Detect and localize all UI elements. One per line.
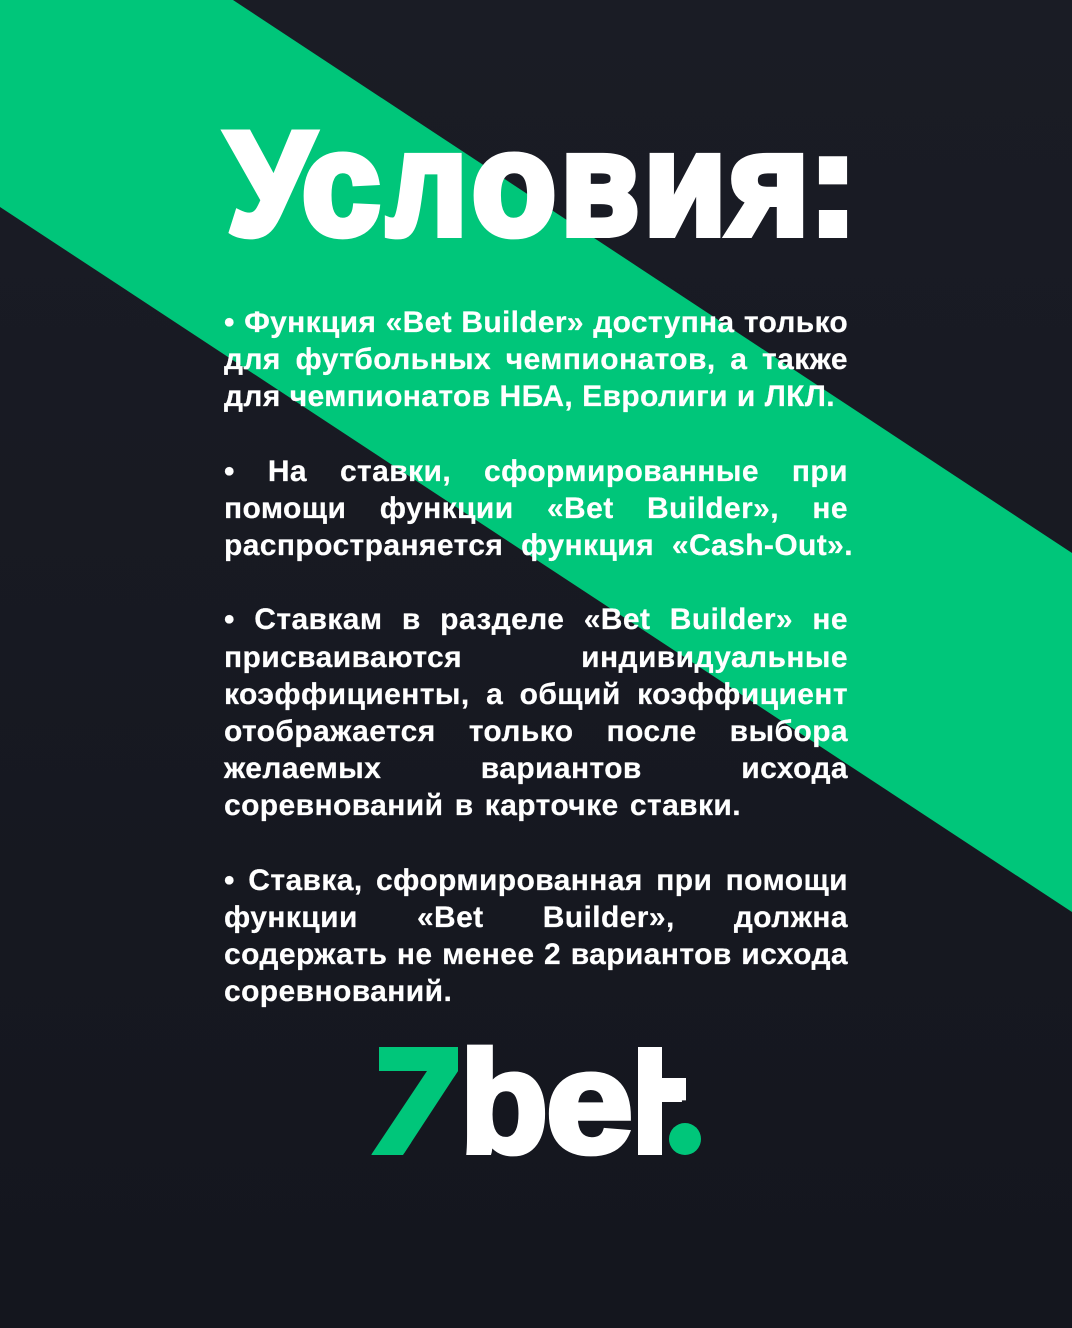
condition 4: • Ставка, сформированная при помощи (224, 864, 848, 897)
title: : (809, 102, 857, 265)
condition 3: коэффициенты, а общий коэффициент (224, 678, 848, 711)
condition 3 (224, 603, 848, 822)
text block: conditions (224, 306, 853, 1008)
condition 3: присваиваются индивидуальные (224, 641, 848, 674)
title: У (227, 102, 315, 265)
condition 2: • На ставки, сформированные при (224, 455, 848, 488)
condition 1: для футбольных чемпионатов, а также (224, 343, 848, 376)
title: о (472, 102, 556, 265)
title: в (561, 102, 639, 265)
condition 3: отображается только после выбора (224, 715, 848, 748)
condition 1: • Функция «Bet Builder» доступна только (224, 306, 848, 339)
condition 4: содержать не менее 2 вариантов исхода (224, 938, 848, 971)
title: и (644, 102, 726, 265)
title: я (728, 102, 809, 265)
title (220, 102, 857, 265)
title: л (387, 102, 467, 265)
logo: 7bet.: e (546, 1022, 633, 1183)
logo: 7bet. (372, 1044, 701, 1156)
condition 4: функции «Bet Builder», должна (224, 901, 848, 934)
logo: 7bet.: b (460, 1022, 548, 1183)
condition 1 (224, 306, 848, 413)
condition 2: распространяется функция «Cash-Out». (224, 529, 853, 562)
condition 1: для чемпионатов НБА, Евролиги и ЛКЛ. (224, 380, 835, 413)
logo: 7bet.: 7 (355, 1022, 477, 1185)
condition 2: помощи функции «Bet Builder», не (224, 492, 848, 525)
condition 4: соревнований. (224, 975, 452, 1008)
condition 4 (224, 864, 848, 1008)
condition 3: желаемых вариантов исхода (224, 752, 848, 785)
condition 2 (224, 455, 853, 562)
condition 3: • Ставкам в разделе «Bet Builder» не (224, 603, 848, 636)
condition 3: соревнований в карточке ставки. (224, 789, 741, 822)
title: с (302, 102, 380, 265)
logo: 7bet.: t (622, 1002, 692, 1208)
